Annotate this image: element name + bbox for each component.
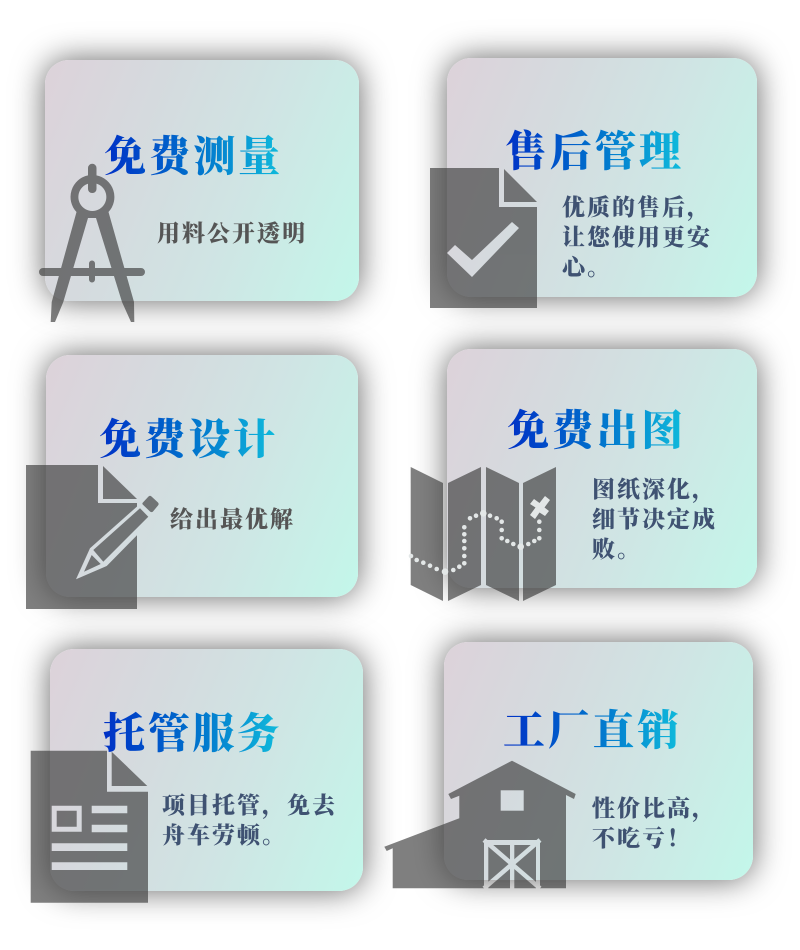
icon: document with check mark [430, 168, 537, 308]
icon: folded map with dotted route [408, 467, 556, 601]
card background [45, 60, 359, 301]
text: after-sales description: 让您使用更安 [562, 225, 712, 250]
panel: free measurement [21, 36, 383, 325]
panel: free design [22, 331, 382, 621]
panel: after-sales management [423, 34, 781, 321]
icon: drafting compass [39, 164, 145, 322]
panel: managed service [26, 625, 387, 915]
icon: document with text lines [30, 750, 148, 903]
heading: free measurement: 免费测量 [104, 135, 283, 181]
heading: free drawings: 免费出图 [507, 409, 686, 455]
text: transparent materials: 用料公开透明 [157, 221, 307, 246]
text: managed service description: 项目托管，免去 [162, 793, 337, 818]
text: drawings description [592, 477, 717, 562]
icon: barn [384, 760, 576, 888]
heading: after-sales management: 售后管理 [505, 130, 684, 176]
panel: factory direct sales [384, 618, 777, 904]
text: drawings description: 细节决定成 [592, 507, 717, 532]
text: after-sales description: 心。 [562, 255, 612, 280]
text: drawings description: 败。 [592, 537, 642, 562]
heading: factory direct sales: 工厂直销 [503, 709, 682, 755]
text: best solution: 给出最优解 [170, 507, 295, 532]
card background [447, 349, 757, 588]
panel: free drawings [408, 325, 781, 612]
icon: document with pencil [26, 465, 159, 609]
card background [444, 642, 753, 880]
text: value description: 不吃亏！ [592, 826, 692, 851]
card background [50, 649, 363, 891]
card background [46, 355, 358, 597]
text: after-sales description [562, 195, 712, 280]
text: value description [592, 796, 717, 851]
text: managed service description [162, 793, 337, 848]
text: value description: 性价比高， [592, 796, 717, 821]
heading: free design: 免费设计 [99, 418, 278, 464]
card background [447, 58, 757, 297]
heading: managed service: 托管服务 [103, 712, 282, 758]
text: after-sales description: 优质的售后， [562, 195, 712, 220]
text: drawings description: 图纸深化， [592, 477, 717, 502]
text: managed service description: 舟车劳顿。 [162, 823, 287, 848]
